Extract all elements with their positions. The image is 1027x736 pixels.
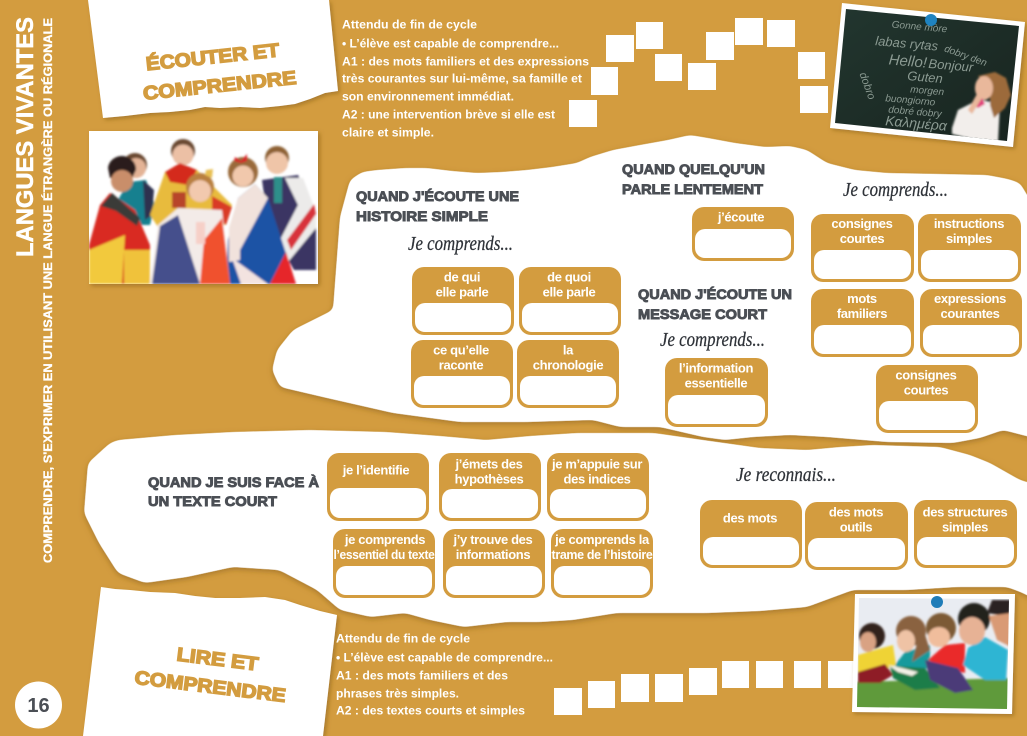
page number: 16 <box>27 695 50 717</box>
box: je comprends l'essentiel du texte: l’essentiel du texte <box>334 547 435 562</box>
box: ce qu'elle raconte: raconte <box>439 358 483 372</box>
photo: girl at blackboard: buongiorno <box>885 93 936 109</box>
text block: attendu top: A1 : des mots familiers et des expressions <box>342 54 589 68</box>
box: des mots outils: outils <box>840 520 872 534</box>
group: je reconnais <box>700 464 1017 570</box>
box: ce qu'elle raconte <box>411 340 513 408</box>
photo: girl at blackboard: Bonjour <box>928 56 975 75</box>
box: expressions courantes <box>920 289 1022 357</box>
photo: girl at blackboard: morgen <box>910 84 945 98</box>
white placeholder squares: bottom <box>554 661 855 715</box>
back boy <box>125 151 149 170</box>
heading: quand j'écoute un message court: QUAND J'ÉCOUTE UN <box>638 286 792 302</box>
box: des mots: des mots <box>723 510 777 526</box>
box: je comprends l'essentiel du texte <box>333 529 435 598</box>
heading: quand quelqu'un parle lentement: PARLE LENTEMENT <box>622 181 763 197</box>
box: je comprends l'essentiel du texte: je comprends <box>344 532 425 547</box>
box: je comprends la trame de l'histoire <box>551 529 653 598</box>
box: des structures simples: simples <box>942 520 988 534</box>
heading: écouter et comprendre: ÉCOUTER ET <box>145 39 281 75</box>
text block: attendu bottom: A2 : des textes courts et simples <box>336 704 525 718</box>
right boy with uk flag <box>265 146 289 170</box>
heading: quand j'écoute un message court <box>638 286 792 322</box>
box: l'information essentielle: l’information <box>679 360 753 376</box>
photo: girl at blackboard: Καλημέρα <box>885 112 949 134</box>
box: je l'identifie <box>327 453 429 521</box>
left boy with german flag <box>108 156 136 178</box>
text block: attendu bottom: phrases très simples. <box>336 686 459 700</box>
box: je m'appuie sur des indices <box>547 453 649 521</box>
text block: attendu bottom: • L’élève est capable de comprendre... <box>336 650 553 664</box>
text block: attendu bottom <box>336 632 553 718</box>
panel: listening blob <box>272 135 1027 443</box>
photo: girl at blackboard: labas rytas <box>875 33 939 54</box>
panel: reading blob <box>84 430 1027 627</box>
heading: écouter et comprendre <box>139 38 297 105</box>
right girl with russian flag <box>228 157 258 187</box>
text block: attendu top: Attendu de fin de cycle <box>342 18 477 32</box>
text block: attendu top <box>342 18 589 140</box>
heading: quand quelqu'un parle lentement <box>622 161 765 197</box>
kid 2 teal <box>895 645 930 672</box>
box: la chronologie: la <box>563 342 574 358</box>
je comprends: Je comprends... <box>660 329 765 351</box>
box: la chronologie: chronologie <box>533 358 603 372</box>
box: des structures simples: des structures <box>923 504 1007 520</box>
photo: girl at blackboard <box>830 3 1025 147</box>
box: consignes courtes 2: courtes <box>904 382 948 398</box>
heading: quand j'écoute une histoire simple: QUAND J'ÉCOUTE UNE <box>356 188 519 204</box>
text block: attendu top: A2 : une intervention brève si elle est <box>342 108 555 122</box>
box: je m'appuie sur des indices: des indices <box>564 472 631 486</box>
heading: quand j'écoute une histoire simple <box>356 188 519 224</box>
heading: quand j'écoute une histoire simple: HISTOIRE SIMPLE <box>356 208 488 224</box>
spain flag kid <box>171 139 195 163</box>
box: j'émets des hypothèses: hypothèses <box>455 472 523 486</box>
group: texte court <box>148 453 653 598</box>
box: la chronologie <box>517 340 619 408</box>
pin <box>931 596 943 608</box>
heading: quand quelqu'un parle lentement: QUAND QUELQU'UN <box>622 161 765 177</box>
panel: torn paper écouter et comprendre <box>88 0 338 118</box>
box: j'y trouve des informations <box>443 529 545 598</box>
photo: girl at blackboard: dobry den <box>943 44 989 69</box>
box: de qui: de qui <box>444 270 480 284</box>
photo: children reading on grass <box>850 594 1015 715</box>
box: je m'appuie sur des indices: je m’appuie sur <box>551 456 642 472</box>
photo: girl at blackboard: Guten <box>907 68 943 86</box>
heading: écouter et comprendre: COMPRENDRE <box>142 68 297 105</box>
box: expressions courantes: expressions <box>934 291 1006 306</box>
heading: quand je suis face à un texte court: QUAND JE SUIS FACE À <box>148 474 319 490</box>
center girl with french flag <box>186 173 214 201</box>
box: des structures simples <box>914 500 1017 568</box>
white placeholder squares: top <box>569 18 828 127</box>
heading: lire et comprendre: COMPRENDRE <box>133 668 287 707</box>
heading: quand je suis face à un texte court <box>148 474 319 509</box>
page number <box>15 682 62 728</box>
box: de quoi <box>519 267 621 335</box>
pin <box>925 14 937 26</box>
text block: attendu bottom: Attendu de fin de cycle <box>336 632 470 646</box>
box: je l'identifie: je l’identifie <box>342 462 409 478</box>
photo: children with flags <box>89 131 318 284</box>
box: de qui: elle parle <box>436 284 489 300</box>
sidebar subtitle: COMPRENDRE, S'EXPRIMER EN UTILISANT UNE LANGUE ÉTRANGÈRE OU RÉGIONALE <box>42 18 55 563</box>
box: j'écoute <box>692 207 794 261</box>
box: je comprends la trame de l'histoire: trame de l’histoire <box>552 547 653 562</box>
kid 1 yellow <box>858 645 896 674</box>
kid 4 cyan <box>963 637 1008 680</box>
panel: torn paper lire et comprendre <box>83 587 337 736</box>
box: des mots outils <box>805 502 908 570</box>
text block: attendu top: son environnement immédiat. <box>342 90 514 104</box>
box: j'écoute: j’écoute <box>717 210 764 224</box>
heading: lire et comprendre <box>133 640 290 707</box>
box: des mots outils: des mots <box>829 504 883 520</box>
box: mots familiers: familiers <box>837 306 887 321</box>
je comprends: Je comprends... <box>408 233 513 255</box>
box: instructions simples <box>918 214 1021 282</box>
box: instructions simples: simples <box>946 231 992 246</box>
heading: lire et comprendre: LIRE ET <box>176 645 260 676</box>
kid 3 red <box>928 643 965 673</box>
group: je comprends right <box>811 179 1022 433</box>
box: l'information essentielle: essentielle <box>685 376 747 390</box>
box: j'émets des hypothèses <box>439 453 541 521</box>
box: je comprends la trame de l'histoire: je comprends la <box>554 532 650 547</box>
box: ce qu'elle raconte: ce qu’elle <box>433 342 489 358</box>
je reconnais: Je reconnais... <box>736 464 836 486</box>
heading: quand j'écoute un message court: MESSAGE COURT <box>638 306 767 322</box>
photo: girl at blackboard: dobré dobry <box>888 105 943 120</box>
box: consignes courtes <box>811 214 914 282</box>
books <box>858 664 893 683</box>
box: j'émets des hypothèses: j’émets des <box>455 456 523 472</box>
box: l'information essentielle <box>665 358 768 427</box>
je comprends: Je comprends... <box>843 179 948 201</box>
box: expressions courantes: courantes <box>941 306 1000 321</box>
text block: attendu top: très courantes sur lui-même, sa famille et <box>342 72 582 86</box>
group: message court <box>638 286 792 427</box>
heading: quand je suis face à un texte court: UN TEXTE COURT <box>148 493 277 509</box>
box: des mots <box>700 500 802 568</box>
photo: girl at blackboard: Gonne mòre <box>891 20 948 35</box>
box: instructions simples: instructions <box>934 216 1004 231</box>
kid 5 <box>987 600 1011 617</box>
sidebar title: LANGUES VIVANTES <box>12 17 39 257</box>
box: de qui <box>412 267 514 335</box>
text block: attendu top: • L’élève est capable de comprendre... <box>342 36 559 50</box>
box: consignes courtes 2: consignes <box>895 368 957 382</box>
box: consignes courtes: consignes <box>831 216 893 231</box>
box: consignes courtes 2 <box>876 365 978 433</box>
box: mots familiers: mots <box>847 291 877 306</box>
group: histoire simple <box>356 188 621 408</box>
box: de quoi: elle parle <box>543 284 596 300</box>
box: consignes courtes: courtes <box>840 231 884 246</box>
photo: girl at blackboard: dobro <box>857 71 877 101</box>
box: de quoi: de quoi <box>547 270 591 284</box>
box: j'y trouve des informations: j’y trouve des <box>453 532 533 547</box>
box: j'y trouve des informations: informations <box>456 547 530 562</box>
text block: attendu top: claire et simple. <box>342 126 434 140</box>
box: mots familiers <box>811 289 914 357</box>
text block: attendu bottom: A1 : des mots familiers et des <box>336 668 508 682</box>
photo: girl at blackboard: Hello! <box>888 51 929 72</box>
group: parle lentement <box>622 161 794 261</box>
